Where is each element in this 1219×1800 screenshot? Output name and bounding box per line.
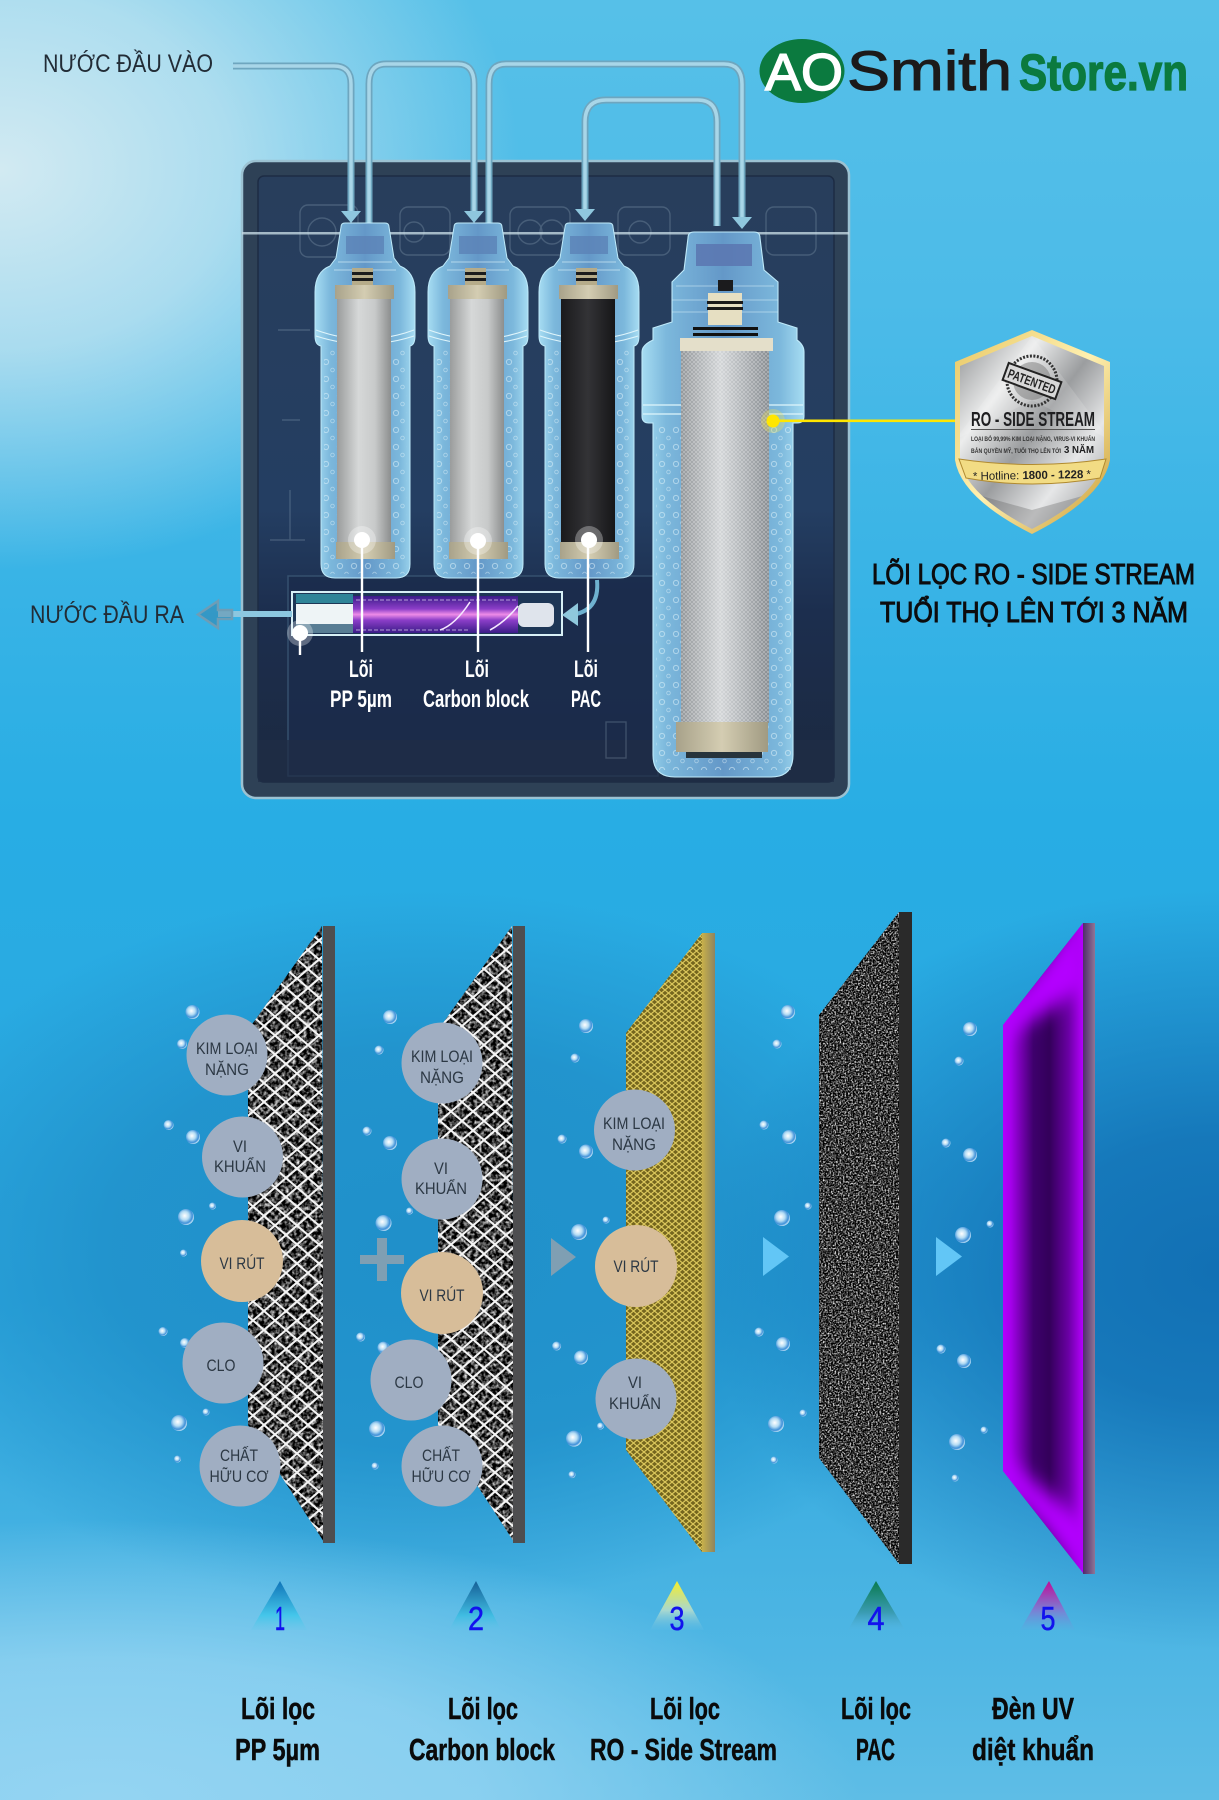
- badge: RO side stream shield: LOẠI BỎ 99,99% KIM LOẠI NẶNG, VIRUS-VI KHUẨN: [971, 434, 1095, 443]
- marker 3: 3: [670, 1600, 684, 1637]
- contaminants: column 1: KIM LOẠI: [196, 1039, 258, 1058]
- contaminants: column 2: VI RÚT: [420, 1286, 464, 1305]
- label: step 1: PP 5µm: [235, 1732, 320, 1767]
- label: PP 5um core: PP 5µm: [330, 686, 392, 713]
- logo: AOSmith Store.vn: Store.vn: [1019, 44, 1188, 101]
- stamp: patented seal: PATENTED: [1006, 366, 1058, 397]
- label: carbon block core: Carbon block: [423, 686, 529, 713]
- badge: RO side stream shield: 3 NĂM: [1064, 443, 1094, 456]
- output UV tube: [292, 592, 562, 635]
- label: step 4: [841, 1691, 911, 1767]
- label: step 3: Lõi lọc: [650, 1691, 720, 1726]
- label: step 4: Lõi lọc: [841, 1691, 911, 1726]
- stamp: patented seal: [1003, 356, 1061, 406]
- heading: RO side stream lifetime: [872, 557, 1195, 629]
- contaminants: column 2: [370, 1022, 483, 1506]
- label: step 3: [590, 1691, 777, 1767]
- filter sheet 4: PAC carbon: [816, 910, 912, 1566]
- contaminants: column 2: KHUẨN: [415, 1179, 467, 1198]
- label: PAC core: Lõi: [574, 656, 598, 683]
- label: PP 5um core: [330, 656, 392, 713]
- label: step 4: PAC: [856, 1732, 895, 1767]
- filter sheet 1: PP mesh: [245, 924, 335, 1544]
- ribbon: hotline: * Hotline: 1800 - 1228 *: [973, 469, 1092, 483]
- marker 2: [449, 1581, 501, 1637]
- contaminants: column 2: KIM LOẠI: [411, 1047, 473, 1066]
- contaminants: column 2: VI: [434, 1159, 448, 1178]
- contaminants: column 3: KHUẨN: [609, 1394, 661, 1413]
- diagram: water pipes between filters: [233, 64, 752, 229]
- marker lines: cartridge callouts: [287, 526, 603, 655]
- ribbon: hotline: [959, 459, 1106, 484]
- logo: AOSmith Store.vn: [760, 39, 1188, 103]
- badge: RO side stream shield: RO - SIDE STREAM: [971, 409, 1095, 431]
- contaminants: column 2: CLO: [394, 1373, 424, 1392]
- label: step 5: diệt khuẩn: [972, 1732, 1094, 1767]
- filter 1: PP 5 micron cartridge: [315, 223, 415, 578]
- arrow: water outlet: [198, 601, 292, 628]
- contaminants: column 1: VI RÚT: [220, 1254, 264, 1273]
- filter 3: PAC cartridge: [539, 223, 639, 578]
- contaminants: column 2: HỮU CƠ: [412, 1467, 471, 1486]
- label: step 1: [235, 1691, 320, 1767]
- marker 2: 2: [468, 1600, 484, 1637]
- contaminants: column 3: NẶNG: [612, 1135, 656, 1154]
- label: carbon block core: Lõi: [465, 656, 489, 683]
- label: PAC core: PAC: [571, 686, 601, 713]
- label: step 5: [972, 1691, 1094, 1767]
- arrow: light blue triangle 2: [936, 1237, 962, 1276]
- badge: RO side stream shield: [955, 330, 1110, 534]
- contaminants: column 1: HỮU CƠ: [210, 1467, 269, 1486]
- arrow: grey triangle: [551, 1238, 576, 1276]
- contaminants: column 1: NẶNG: [205, 1060, 249, 1079]
- contaminants: column 2: CHẤT: [422, 1446, 460, 1465]
- contaminants: column 3: VI RÚT: [614, 1257, 658, 1276]
- marker 3: [650, 1581, 704, 1637]
- contaminants: column 1: KHUẨN: [214, 1157, 266, 1176]
- marker 4: [848, 1581, 905, 1637]
- marker 5: [1020, 1581, 1075, 1637]
- filter sheet 5: UV light: [995, 915, 1095, 1580]
- contaminants: column 1: CLO: [206, 1356, 236, 1375]
- marker 5: 5: [1040, 1600, 1056, 1637]
- heading: output water label: NƯỚC ĐẦU RA: [30, 600, 184, 629]
- filter sheet 2: carbon mesh: [435, 924, 525, 1544]
- label: step 5: Đèn UV: [992, 1691, 1074, 1726]
- marker 4: 4: [868, 1600, 884, 1637]
- badge: RO side stream shield: BẢN QUYỀN MỸ, TUỔI THỌ LÊN TỚI: [971, 445, 1061, 455]
- marker 1: [251, 1581, 307, 1637]
- logo: AOSmith Store.vn: Smith: [847, 39, 1012, 102]
- callout connector: yellow line to shield: [761, 409, 957, 433]
- icon: plus: [360, 1238, 404, 1281]
- label: step 2: Carbon block: [409, 1732, 556, 1767]
- contaminants: column 1: VI: [233, 1137, 247, 1156]
- label: PAC core: [571, 656, 601, 713]
- logo: AOSmith Store.vn: AO: [765, 44, 843, 102]
- contaminants: column 1: [182, 1014, 283, 1506]
- contaminants: column 1: CHẤT: [220, 1446, 258, 1465]
- marker 1: 1: [275, 1600, 285, 1637]
- label: step 2: [409, 1691, 556, 1767]
- arrow: PAC to UV tube: [562, 580, 597, 626]
- heading: input water label: NƯỚC ĐẦU VÀO: [43, 49, 213, 78]
- contaminants: column 3: KIM LOẠI: [603, 1114, 665, 1133]
- label: step 2: Lõi lọc: [448, 1691, 518, 1726]
- filter sheet 3: RO gold membrane: [626, 933, 715, 1552]
- water droplets: [158, 1005, 994, 1482]
- label: carbon block core: [423, 656, 529, 713]
- contaminants: column 3: VI: [628, 1373, 642, 1392]
- panel: water filter housing: [242, 161, 849, 798]
- label: step 1: Lõi lọc: [241, 1691, 315, 1726]
- label: PP 5um core: Lõi: [349, 656, 373, 683]
- contaminants: column 3: [594, 1090, 677, 1440]
- contaminants: column 2: NẶNG: [420, 1068, 464, 1087]
- filter 2: carbon block cartridge: [428, 223, 528, 578]
- filter 4: large RO side stream cartridge: [642, 232, 804, 777]
- label: step 3: RO - Side Stream: [590, 1732, 777, 1767]
- arrow: light blue triangle 1: [763, 1237, 789, 1276]
